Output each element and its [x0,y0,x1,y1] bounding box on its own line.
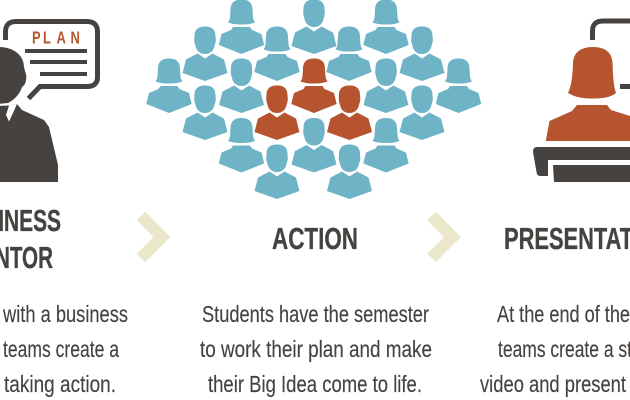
text block: business mentor: with a business [2,301,128,327]
arrow: action to presentation [432,216,452,258]
text block: business mentor: taking action. [4,371,116,397]
heading: business mentor [0,203,61,275]
text block: action [200,301,432,397]
speech bubble [6,22,98,98]
icon: presenter at lectern [533,21,630,182]
text block: action: to work their plan and make [200,336,432,362]
bubble text lines [25,49,87,76]
text block: business mentor: teams create a [3,336,119,362]
text block: presentation [480,301,630,397]
text block: business mentor [2,301,128,397]
arrow: mentor to action [141,216,162,258]
icon: crowd of students [146,0,481,199]
teal students [146,0,481,199]
screen line [620,84,630,89]
plan label: PLAN [32,29,80,48]
text block: action: Students have the semester [202,301,429,327]
heading: action: ACTION [272,221,358,256]
highlighted students [254,58,372,140]
lectern [533,147,630,182]
text block: action: their Big Idea come to life. [208,371,422,397]
icon: business mentor with plan speech bubble [0,22,98,182]
presenter [546,47,630,141]
screen outline [592,21,630,40]
mentor silhouette [0,47,58,182]
